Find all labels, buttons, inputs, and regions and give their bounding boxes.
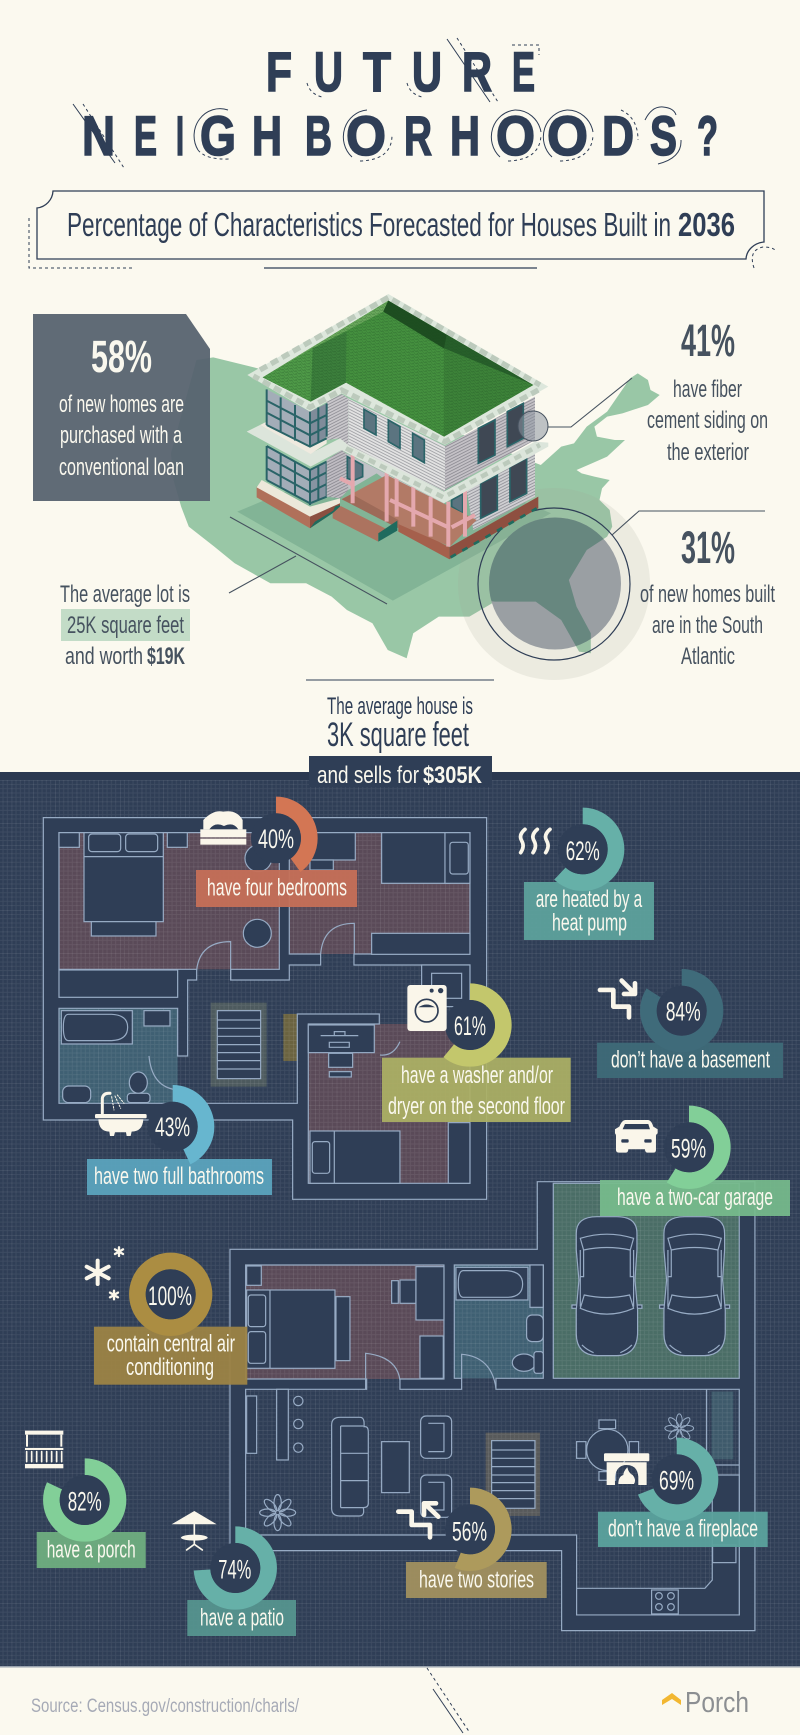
text: South Atlantic: 31% bbox=[681, 522, 735, 573]
porch floor and steps bbox=[333, 475, 477, 547]
icon: washing machine bbox=[407, 985, 447, 1031]
stat: washer and dryer: 61% bbox=[454, 1011, 486, 1041]
donut 100% bbox=[137, 1261, 204, 1328]
icon: bathtub bbox=[95, 1093, 147, 1136]
stat: two-car garage: 59% bbox=[671, 1134, 706, 1164]
stat: four bedrooms: 40% bbox=[258, 824, 294, 854]
footer source: Source: Census.gov/construction/charls/ bbox=[31, 1696, 300, 1717]
lot callout: 25K square feet bbox=[67, 612, 184, 639]
title: S bbox=[650, 104, 677, 167]
stat: two stories: 56% bbox=[452, 1517, 487, 1547]
stairs bbox=[217, 1011, 261, 1079]
Porch logo: Porch bbox=[685, 1687, 749, 1719]
living room furniture bbox=[247, 1389, 694, 1531]
title: H bbox=[252, 104, 282, 167]
isometric house bbox=[247, 294, 548, 559]
title: O bbox=[496, 104, 535, 167]
stat: porch: 82% bbox=[68, 1487, 102, 1517]
stat: porch: have a porch bbox=[47, 1537, 136, 1564]
bathroom fixtures bbox=[61, 1011, 170, 1103]
siding callout bbox=[518, 378, 632, 441]
donut 61% bbox=[437, 992, 503, 1058]
title: G bbox=[200, 104, 236, 167]
icon: porch bbox=[25, 1431, 63, 1468]
stat: two full bathrooms bbox=[87, 1093, 272, 1195]
kitchen counter bbox=[577, 1389, 739, 1615]
stat: four bedrooms bbox=[196, 805, 357, 907]
stat: washer and dryer: have a washer and/or bbox=[401, 1062, 553, 1089]
porch posts bbox=[340, 455, 475, 547]
stat: washer and dryer: dryer on the second floor bbox=[388, 1093, 565, 1120]
text: South Atlantic: Atlantic bbox=[681, 643, 735, 670]
lot callout: The average lot is bbox=[60, 581, 190, 608]
donut 74% bbox=[202, 1535, 269, 1601]
blueprint grid bbox=[0, 780, 800, 1667]
subtitle box bbox=[29, 191, 775, 268]
upper floor walls bbox=[260, 389, 535, 492]
icon: stairs down bbox=[600, 981, 635, 1017]
stat: heat pump bbox=[521, 816, 654, 940]
stat: central air: contain central air bbox=[107, 1331, 235, 1358]
icon: heat waves bbox=[521, 829, 550, 853]
donut 40% bbox=[243, 805, 309, 872]
title: T bbox=[363, 40, 391, 103]
title: F bbox=[266, 40, 292, 103]
title: E bbox=[134, 104, 157, 167]
lower bedroom furniture bbox=[247, 1266, 496, 1389]
icon: fireplace bbox=[604, 1453, 649, 1485]
stat: two full bathrooms: have two full bathrooms bbox=[94, 1163, 264, 1190]
lower floor walls bbox=[257, 446, 535, 530]
stat: central air: conditioning bbox=[126, 1354, 214, 1381]
second storey eave bbox=[247, 425, 548, 503]
title: U bbox=[412, 40, 442, 103]
garage cars bbox=[572, 1217, 730, 1356]
donut 56% bbox=[437, 1496, 503, 1563]
stat: fireplace: 69% bbox=[659, 1465, 694, 1495]
title: N bbox=[82, 104, 115, 167]
stat: central air: 100% bbox=[148, 1281, 192, 1311]
title: R bbox=[404, 104, 432, 167]
average house callout: $305K bbox=[423, 762, 482, 789]
stat: heat pump: 62% bbox=[566, 836, 600, 866]
stat: no basement bbox=[597, 977, 783, 1078]
average house callout: and sells for bbox=[317, 762, 419, 789]
donut 59% bbox=[656, 1114, 722, 1181]
lower bathroom fixtures bbox=[456, 1265, 543, 1373]
panel: conventional loan: of new homes are bbox=[59, 391, 184, 418]
stat: two full bathrooms: 43% bbox=[155, 1112, 190, 1142]
text: fiber cement siding: the exterior bbox=[667, 439, 749, 466]
title: ? bbox=[697, 104, 718, 167]
upper floor plan bbox=[43, 818, 487, 1199]
donut 43% bbox=[139, 1093, 206, 1160]
stat: porch bbox=[25, 1431, 146, 1568]
panel: conventional loan bbox=[33, 314, 210, 501]
text: fiber cement siding: 41% bbox=[681, 315, 735, 366]
icon: snowflakes bbox=[87, 1247, 123, 1299]
donut 84% bbox=[648, 977, 715, 1044]
South Atlantic magnifier bbox=[458, 488, 765, 680]
stat: two stories bbox=[398, 1496, 547, 1598]
icon: patio umbrella bbox=[172, 1511, 217, 1550]
roof bbox=[247, 294, 548, 445]
title: O bbox=[346, 104, 386, 167]
text: fiber cement siding bbox=[647, 315, 768, 466]
room colours bbox=[59, 833, 470, 1183]
average house callout: 3K square feet bbox=[327, 716, 469, 754]
icon: bed bbox=[200, 811, 246, 845]
panel: conventional loan: conventional loan bbox=[59, 454, 184, 481]
map of the US with lot bbox=[171, 357, 660, 658]
average house callout bbox=[306, 680, 494, 789]
title: I bbox=[176, 104, 184, 167]
title: E bbox=[512, 40, 535, 103]
bedroom furniture bbox=[59, 833, 470, 1089]
stat: patio bbox=[172, 1511, 296, 1636]
house foundation bbox=[257, 487, 538, 559]
title: H bbox=[450, 104, 480, 167]
panel: blueprint floor bbox=[0, 772, 800, 1668]
average house callout: The average house is bbox=[327, 693, 473, 720]
panel: conventional loan: 58% bbox=[91, 331, 152, 382]
title: D bbox=[602, 104, 634, 167]
donut 62% bbox=[549, 816, 616, 883]
title: R bbox=[462, 40, 492, 103]
donut 69% bbox=[643, 1446, 710, 1513]
stat: patio: have a patio bbox=[200, 1605, 284, 1632]
lower stairs bbox=[492, 1441, 535, 1508]
second bedroom furniture bbox=[308, 965, 470, 1183]
stat: heat pump: are heated by a bbox=[536, 886, 642, 913]
stat: four bedrooms: have four bedrooms bbox=[207, 875, 347, 902]
stat: central air bbox=[87, 1247, 247, 1385]
text: South Atlantic bbox=[640, 522, 775, 670]
panel: conventional loan: purchased with a bbox=[60, 422, 182, 449]
title: U bbox=[314, 40, 343, 103]
donut 82% bbox=[51, 1467, 118, 1533]
title: O bbox=[547, 104, 588, 167]
lower floor plan bbox=[230, 1182, 755, 1631]
lot callout bbox=[60, 517, 387, 670]
stat: fireplace bbox=[598, 1446, 768, 1547]
title bbox=[73, 38, 718, 168]
footer dashed lines bbox=[427, 1668, 470, 1733]
stat: heat pump: heat pump bbox=[552, 910, 627, 937]
lot callout: $19K bbox=[147, 643, 185, 670]
stat: no basement: 84% bbox=[666, 997, 701, 1027]
text: fiber cement siding: have fiber bbox=[673, 376, 742, 403]
dining table bbox=[577, 1420, 639, 1480]
stat: washer and dryer bbox=[382, 985, 571, 1122]
title: B bbox=[305, 104, 332, 167]
icon: car bbox=[615, 1120, 658, 1153]
stat: patio: 74% bbox=[218, 1555, 251, 1585]
stat: two-car garage bbox=[600, 1114, 790, 1216]
Porch logo bbox=[662, 1687, 749, 1719]
stat: two stories: have two stories bbox=[419, 1566, 534, 1593]
subtitle box: 2036 bbox=[678, 207, 735, 244]
lot callout: and worth bbox=[65, 643, 143, 670]
icon: stairs up bbox=[398, 1503, 438, 1537]
